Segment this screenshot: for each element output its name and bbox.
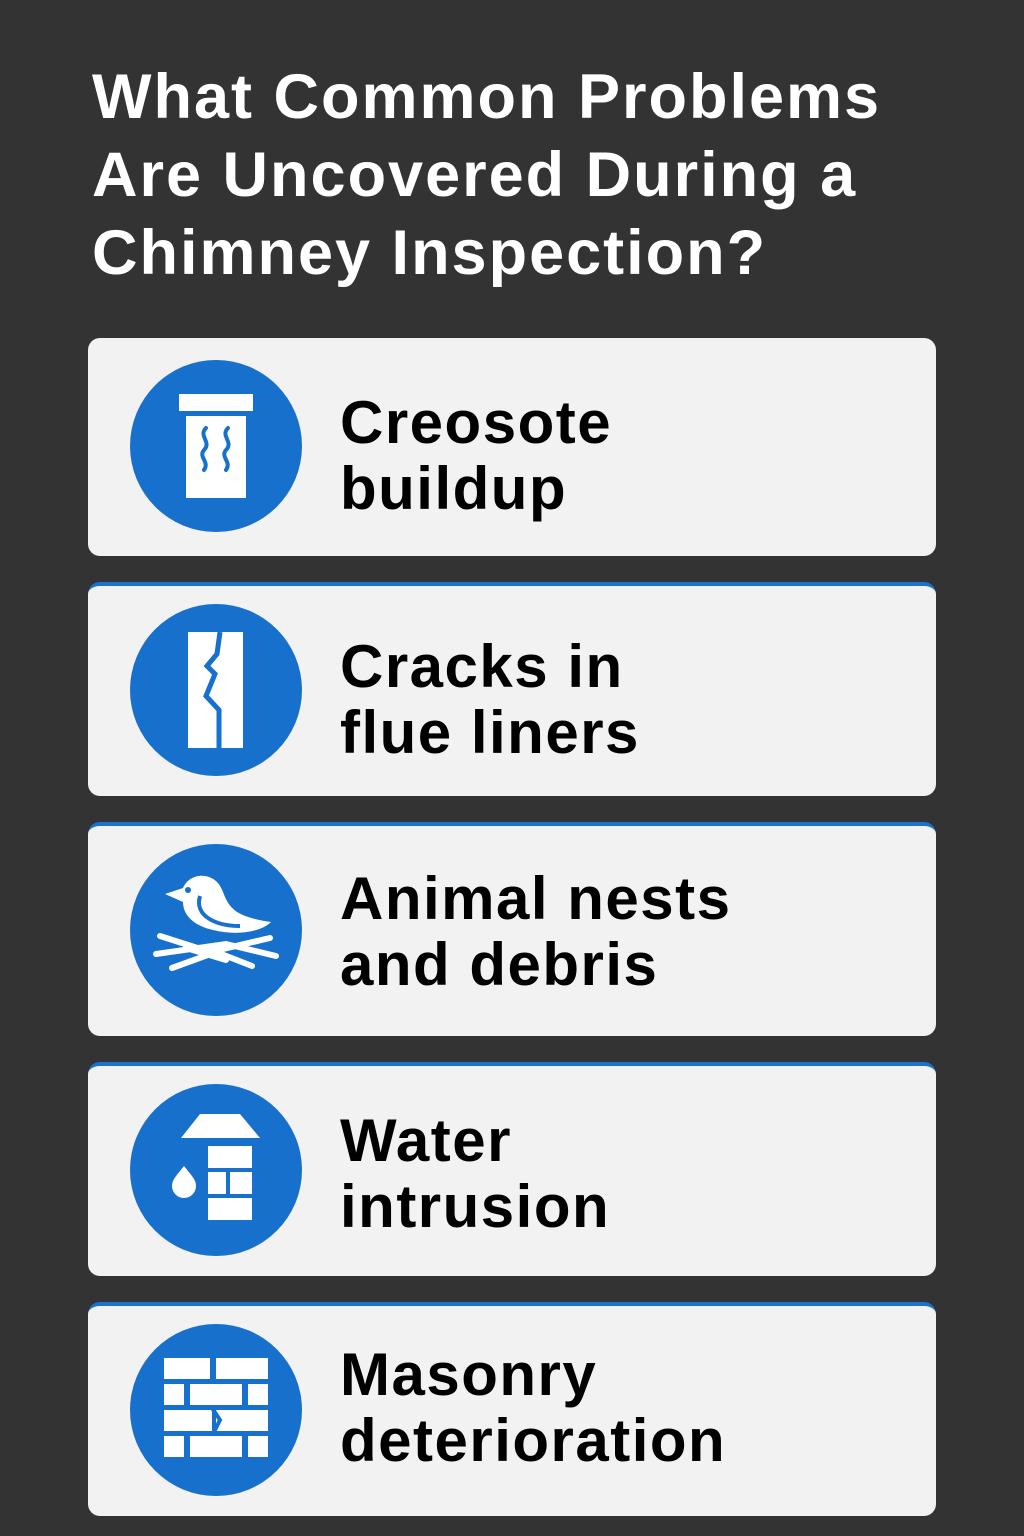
label: flue liners <box>340 699 640 766</box>
icon: brick wall <box>130 1324 302 1496</box>
title: What Common Problems <box>92 62 881 132</box>
label: Creosote <box>340 389 612 456</box>
label: Animal nests <box>340 865 731 932</box>
label <box>340 865 731 998</box>
label <box>340 633 640 766</box>
panel: masonry <box>88 1302 936 1516</box>
icon: bird nest <box>130 844 302 1016</box>
icon: chimney with smoke <box>130 360 302 532</box>
title <box>92 62 881 288</box>
panel: water <box>88 1062 936 1276</box>
icon: cracked liner <box>130 604 302 776</box>
label: Cracks in <box>340 633 624 700</box>
title: Are Uncovered During a <box>92 140 857 210</box>
panel: creosote <box>88 338 936 556</box>
icon: chimney with water drop <box>130 1084 302 1256</box>
label: deterioration <box>340 1407 726 1474</box>
label: intrusion <box>340 1173 610 1240</box>
panel: nests <box>88 822 936 1036</box>
label <box>340 1107 610 1240</box>
panel: cracks <box>88 582 936 796</box>
label: Masonry <box>340 1341 597 1408</box>
label <box>340 389 612 522</box>
label: Water <box>340 1107 512 1174</box>
title: Chimney Inspection? <box>92 218 767 288</box>
label <box>340 1341 726 1474</box>
label: and debris <box>340 931 658 998</box>
label: buildup <box>340 455 567 522</box>
